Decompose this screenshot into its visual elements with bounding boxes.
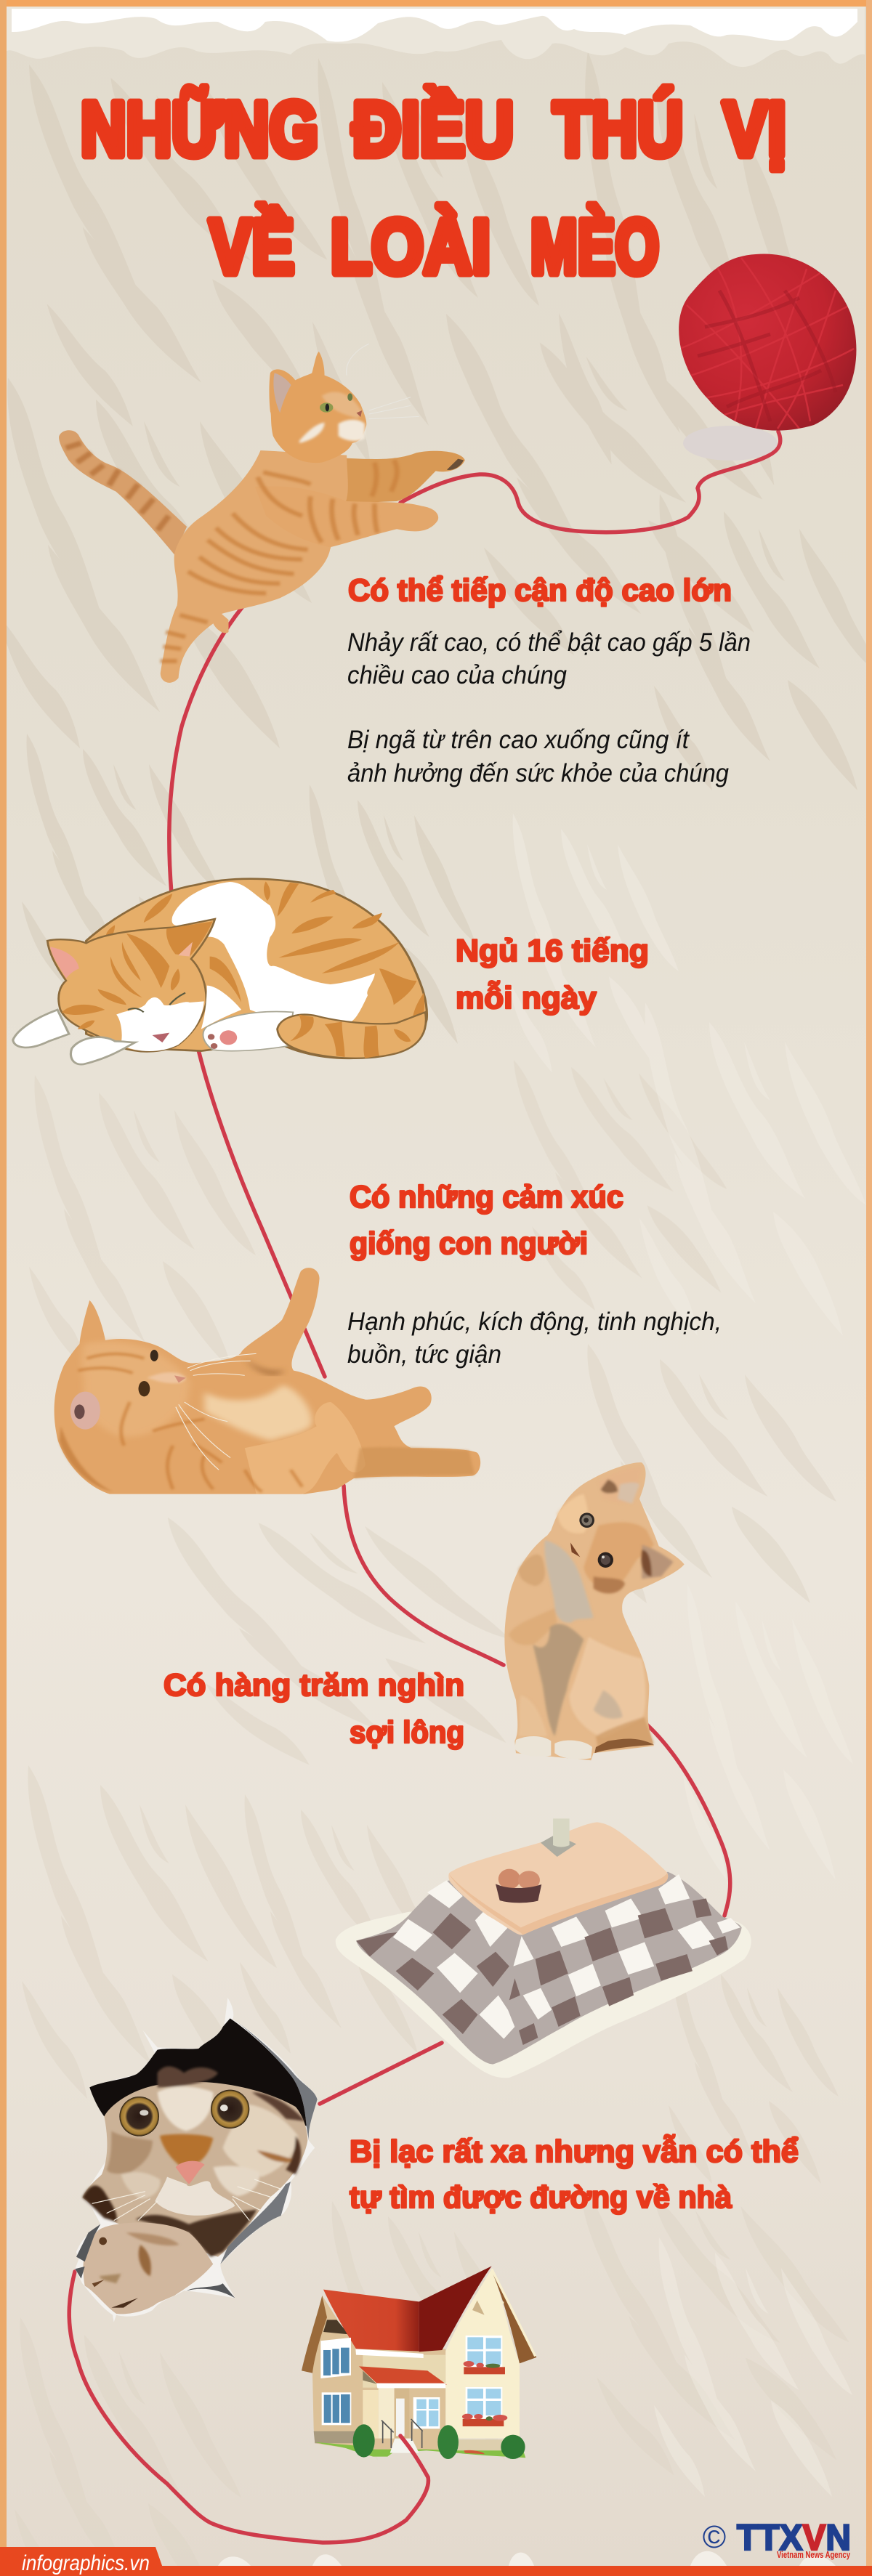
section 4 heading: Có hàng trăm nghìn [164,1668,464,1703]
title: MÈO [530,204,659,290]
bottom pale drips [218,2551,836,2566]
cat 4: kitten tilting head [504,1462,685,1760]
TTXVN logo: © [703,2519,726,2555]
title: NHỮNG [81,86,318,172]
footer band with website label [0,2547,872,2576]
icon: red yarn ball [679,254,856,461]
TTXVN logo: TTXVN [737,2517,851,2558]
title: VỊ [723,86,786,172]
section 3 heading [350,1180,623,1261]
kotatsu table [336,1818,751,2078]
section 4 heading: sợi lông [350,1715,464,1750]
title: VỀ [209,204,294,290]
section 1 heading: Có thể tiếp cận độ cao lớn [348,573,732,608]
title: ĐIỀU [352,86,514,172]
cat 5: cat peeking through torn hole [75,1998,318,2322]
section 4 heading [164,1668,464,1750]
title: LOÀI [331,204,490,290]
section 3 text: buồn, tức giận [347,1340,501,1369]
top white drips [7,7,865,67]
cat 1: jumping orange cat [59,344,465,683]
section 3 heading: Có những cảm xúc [350,1180,623,1215]
cat 3: lying orange cat [54,1268,480,1494]
section 1 text: chiều cao của chúng [347,661,567,689]
section 5 heading: tự tìm được đường về nhà [350,2180,732,2215]
section 5 heading [350,2134,799,2215]
section 2 heading: Ngủ 16 tiếng [456,933,649,968]
string end at house [400,2436,428,2477]
section 2 heading [456,933,649,1016]
title [81,86,786,290]
string [69,432,780,2543]
section 1 text: Bị ngã từ trên cao xuống cũng ít [347,726,690,754]
cat 2: sleeping cartoon cat [13,879,427,1064]
TTXVN logo: Vietnam News Agency [777,2550,850,2560]
section 1 text: Nhảy rất cao, có thể bật cao gấp 5 lần [347,628,751,657]
section 5 heading: Bị lạc rất xa nhưng vẫn có thể [350,2134,799,2169]
section 3 heading: giống con người [350,1226,588,1261]
section 2 heading: mỗi ngày [456,980,597,1016]
section 1 text [347,628,751,787]
house [302,2266,536,2459]
footer band with website label: infographics.vn [22,2551,150,2575]
section 1 text: ảnh hưởng đến sức khỏe của chúng [347,759,729,787]
section 3 text [347,1308,722,1369]
title: THÚ [553,86,683,172]
section 3 text: Hạnh phúc, kích động, tinh nghịch, [347,1308,722,1336]
